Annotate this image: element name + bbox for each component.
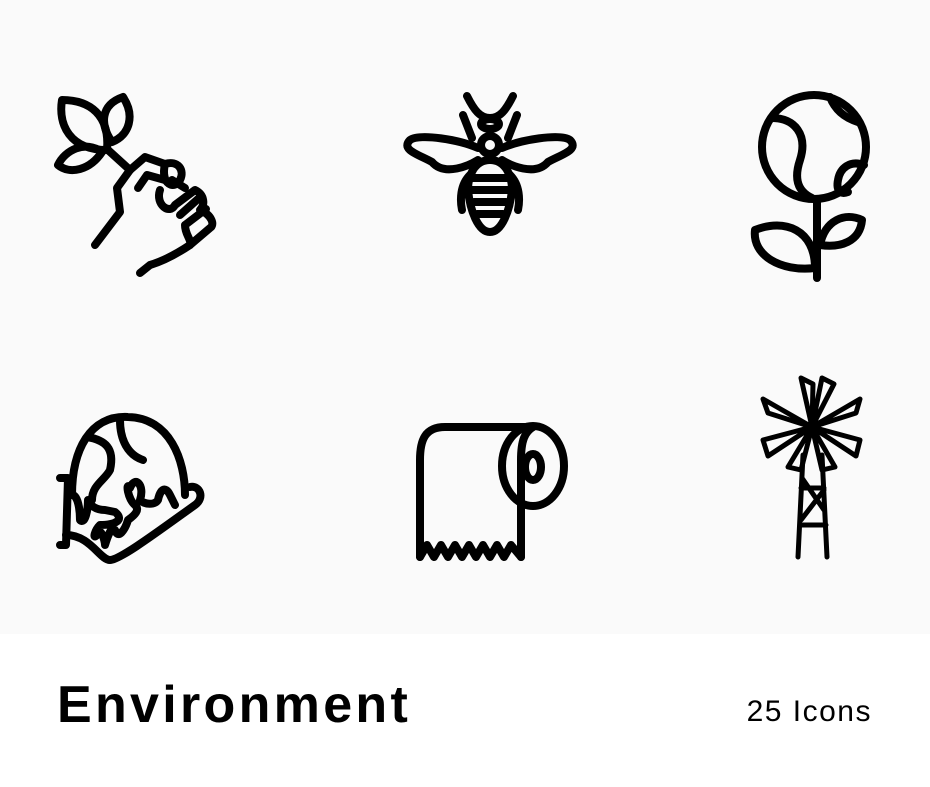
icon: windmill <box>763 378 860 557</box>
icon: bee <box>407 96 573 232</box>
icon count: 25 Icons <box>747 695 872 728</box>
icon: toilet paper <box>420 426 564 557</box>
icon: melting globe in hand <box>60 417 200 560</box>
icon: globe flower <box>755 95 866 278</box>
icon: hand holding plant <box>58 97 212 273</box>
title: Environment <box>57 676 411 734</box>
